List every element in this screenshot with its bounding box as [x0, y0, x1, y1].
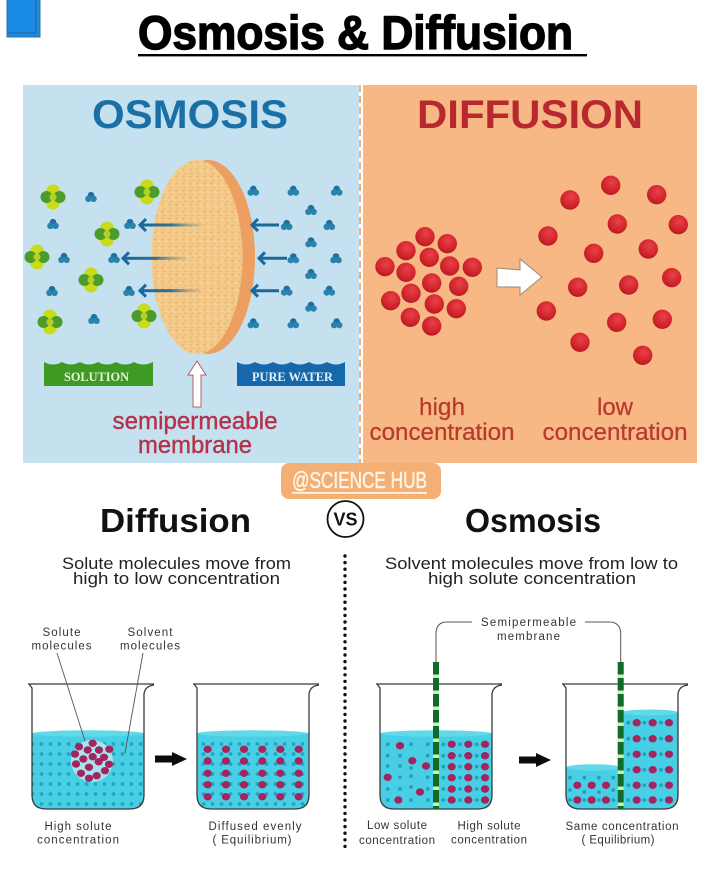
label: solvent molecules: Solvent — [128, 627, 173, 639]
water molecules right — [248, 186, 343, 328]
label: low solute concentration: concentration — [359, 835, 435, 847]
high concentration particles — [375, 227, 482, 336]
label: low solute concentration: Low solute — [367, 820, 427, 832]
label: low concentration: concentration — [542, 419, 688, 446]
label: solvent molecules: molecules — [120, 640, 180, 652]
text: diffusion description — [62, 555, 291, 588]
label: solvent molecules — [120, 627, 180, 652]
heading: osmosis comparison: Osmosis — [465, 502, 601, 539]
label: semipermeable membrane — [112, 408, 278, 459]
arrows right side — [252, 219, 287, 297]
label: semipermeable membrane callout — [436, 617, 621, 662]
solute molecules — [24, 180, 160, 334]
label: high solute concentration — [37, 821, 119, 846]
beaker: same concentration — [562, 662, 688, 809]
arrow: osmosis step — [519, 753, 551, 767]
label: high solute concentration right: concentration — [451, 834, 527, 846]
label: low solute concentration — [359, 820, 435, 847]
label: high solute concentration right — [451, 820, 527, 846]
panel: diffusion — [363, 85, 697, 463]
label: semipermeable membrane: membrane — [138, 432, 252, 459]
label: same concentration: ( Equilibrium) — [582, 834, 655, 846]
label: diffused evenly: ( Equilibrium) — [212, 834, 292, 846]
text: osmosis description: Solvent molecules move from low to — [385, 555, 678, 573]
text: osmosis description: high solute concentration — [428, 570, 636, 588]
label: solution: SOLUTION — [64, 369, 130, 384]
beaker: low and high solute — [376, 662, 502, 809]
label: semipermeable membrane callout: membrane — [497, 631, 560, 643]
text: diffusion description: high to low concentration — [73, 570, 280, 588]
label: high concentration — [370, 394, 514, 446]
label: semipermeable membrane: semipermeable — [112, 408, 278, 435]
badge: science hub — [281, 463, 441, 499]
title: Osmosis & Diffusion — [138, 6, 573, 59]
label: solution — [44, 362, 153, 386]
label: solute molecules: molecules — [32, 640, 92, 652]
label: semipermeable membrane callout: Semipermeable — [481, 617, 576, 629]
arrow: diffusion step — [155, 752, 187, 766]
label: same concentration: Same concentration — [566, 821, 678, 833]
heading: diffusion: DIFFUSION — [417, 93, 643, 137]
beaker: high solute concentration — [28, 653, 154, 809]
label: diffused evenly: Diffused evenly — [208, 821, 302, 833]
arrow: up to membrane — [188, 361, 206, 407]
heading: diffusion comparison: Diffusion — [100, 502, 251, 539]
label: low concentration: low — [597, 394, 634, 421]
arrow: high to low — [497, 259, 542, 295]
label: pure water: PURE WATER — [252, 369, 334, 384]
label: same concentration — [566, 821, 678, 846]
label: solute molecules — [32, 627, 92, 652]
low concentration particles — [537, 176, 688, 365]
text: diffusion description: Solute molecules move from — [62, 555, 291, 573]
label: high concentration: concentration — [370, 419, 514, 446]
semipermeable membrane disc — [152, 160, 255, 354]
text: osmosis description — [385, 555, 678, 588]
label: high solute concentration: High solute — [44, 821, 112, 833]
vs badge — [328, 501, 364, 537]
label: diffused evenly — [208, 821, 302, 846]
label: solute molecules: Solute — [42, 627, 80, 639]
beaker: diffused evenly — [193, 684, 319, 809]
badge: science hub: @SCIENCE HUB — [292, 467, 427, 493]
panel: osmosis — [23, 85, 359, 463]
label: high solute concentration: concentration — [37, 834, 119, 846]
label: pure water — [237, 362, 345, 386]
vs badge: VS — [334, 510, 358, 530]
water molecules left — [46, 192, 136, 324]
icon: book — [7, 0, 40, 37]
arrows through membrane left — [123, 219, 201, 297]
heading: osmosis: OSMOSIS — [92, 93, 288, 137]
label: high solute concentration right: High solute — [458, 820, 520, 832]
label: low concentration — [542, 394, 688, 446]
label: high concentration: high — [419, 394, 465, 421]
